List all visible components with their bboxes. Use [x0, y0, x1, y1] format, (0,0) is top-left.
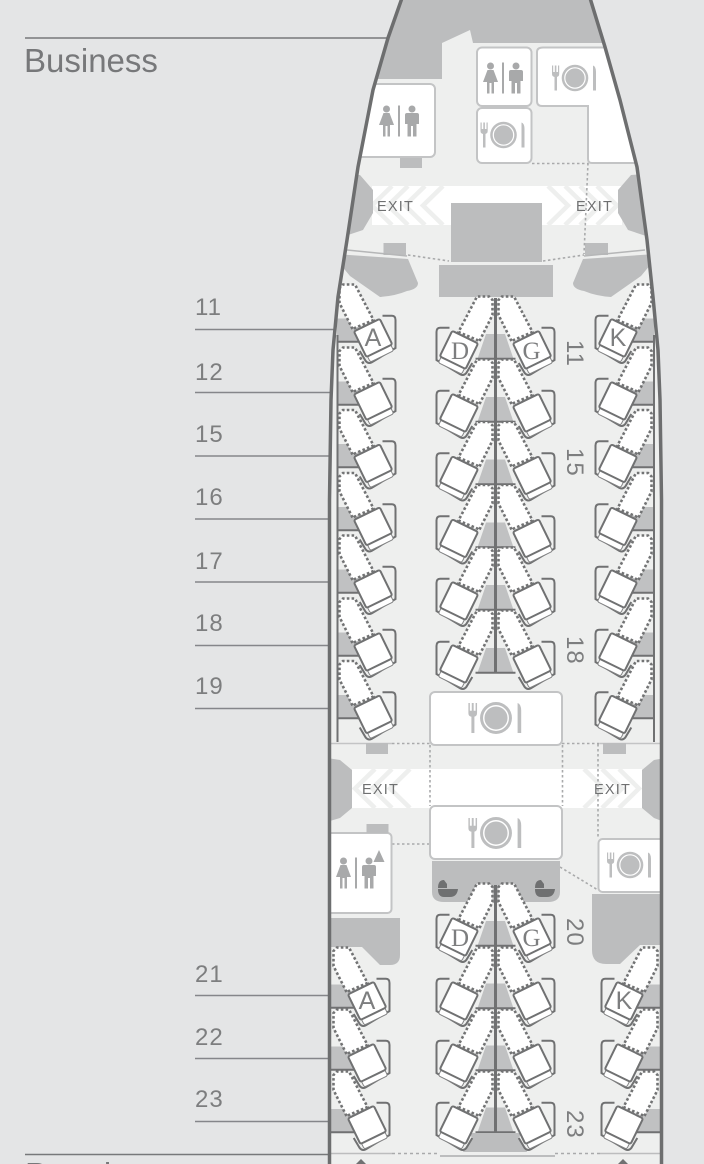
dotted partitions, middle: [392, 744, 600, 890]
icon: accessible lavatory: [336, 850, 384, 888]
seats column K, forward cabin: [596, 284, 652, 740]
door bulges, middle: [331, 758, 660, 820]
seats column A, forward cabin: [340, 284, 396, 740]
galley, top right: [536, 46, 634, 164]
lavatory, top left: [362, 83, 436, 158]
exit band, upper: [372, 186, 622, 225]
fuselage interior: [320, 0, 680, 1164]
inner walls, forward cabin: [338, 335, 654, 742]
aft partition and door arrows, rear cabin: [331, 1154, 661, 1164]
rear cabin seat letters: [359, 925, 633, 1015]
row number labels, left: 15: [195, 421, 224, 448]
seats column K, rear cabin: [602, 948, 658, 1150]
rear cabin seat letters: K: [616, 987, 633, 1015]
forward cabin seat letters: A: [365, 324, 382, 352]
galley, mid right: [598, 839, 678, 892]
row number labels, left: [195, 294, 224, 1113]
bassinet bulkhead: [432, 861, 560, 902]
forward cabin seat letters: K: [610, 324, 627, 352]
centre spine, forward cabin: [494, 298, 497, 673]
seats column D, rear cabin: [436, 884, 492, 1150]
icon: meal, mid cabin lower: [468, 817, 521, 849]
row number labels, left: 11: [195, 294, 222, 321]
rotated row numbers, inside cabin: 11: [561, 340, 588, 367]
rotated row numbers, inside cabin: 15: [561, 448, 588, 477]
rear cabin seat letters: D: [451, 925, 469, 952]
seats column A, rear cabin: [334, 948, 390, 1150]
exit band, middle: [352, 769, 642, 808]
closets flanking monument: [344, 254, 648, 297]
rotated row numbers, inside cabin: 20: [561, 918, 588, 947]
row number labels, left: 18: [195, 610, 224, 637]
closets, rear cabin front: [320, 894, 670, 965]
row number labels, left: 19: [195, 673, 224, 700]
rear cabin seat letters: A: [359, 987, 376, 1015]
section rules: [25, 38, 388, 1154]
exit label, middle left: EXIT: [362, 782, 399, 798]
icon: lavatory, top left: [379, 106, 419, 136]
exit label, upper right: EXIT: [576, 199, 613, 215]
icon: bassinet left: [438, 880, 458, 897]
forward cabin seat letters: G: [522, 338, 541, 365]
nose bulkhead: [378, 0, 602, 79]
rear cabin seat letters: G: [522, 925, 541, 952]
fuselage outline: [330, 0, 662, 1164]
row number labels, left: 16: [195, 484, 224, 511]
row number labels, left: 22: [195, 1024, 224, 1051]
row number labels, left: 12: [195, 359, 224, 386]
row number labels, left: 23: [195, 1086, 224, 1113]
rotated row numbers, inside cabin: 18: [561, 636, 588, 665]
lavatory, mid left: [331, 832, 392, 914]
aft partition of forward cabin: [330, 743, 662, 754]
exit label, upper left: EXIT: [377, 199, 414, 215]
galley, small top centre: [477, 108, 532, 163]
rotated row numbers, inside cabin: 23: [561, 1110, 588, 1139]
icon: meal, mid cabin top: [468, 702, 521, 734]
door bulges, upper: [350, 174, 645, 236]
icon: lavatory, top centre: [483, 62, 523, 94]
row number labels, left: 21: [195, 961, 224, 988]
rotated row numbers, inside cabin: [561, 340, 588, 1139]
heading: Business: Business: [24, 42, 158, 79]
forward cabin seat letters: [364, 328, 626, 360]
seats column G, forward cabin: [498, 296, 554, 689]
forward cabin seat letters: D: [451, 338, 469, 365]
lavatory, top centre: [477, 48, 532, 106]
galley, mid cabin lower: [430, 806, 562, 859]
seats column G, rear cabin: [498, 884, 554, 1150]
dotted partitions, upper: [408, 163, 588, 261]
icon: bassinet right: [535, 880, 555, 897]
icon: meal, mid right: [607, 852, 651, 878]
cabin dividers and shaded consoles: [331, 318, 660, 1152]
seats column D, forward cabin: [436, 296, 492, 689]
galley, mid cabin top: [430, 692, 562, 745]
row number labels, left: 17: [195, 548, 224, 575]
centre spine, rear cabin: [494, 885, 497, 1132]
icon: meal, small galley: [480, 122, 524, 148]
row leader lines: [195, 330, 336, 1122]
icon: meal, top galley: [552, 65, 596, 91]
central monument: [451, 203, 542, 262]
exit label, middle right: EXIT: [594, 782, 631, 798]
